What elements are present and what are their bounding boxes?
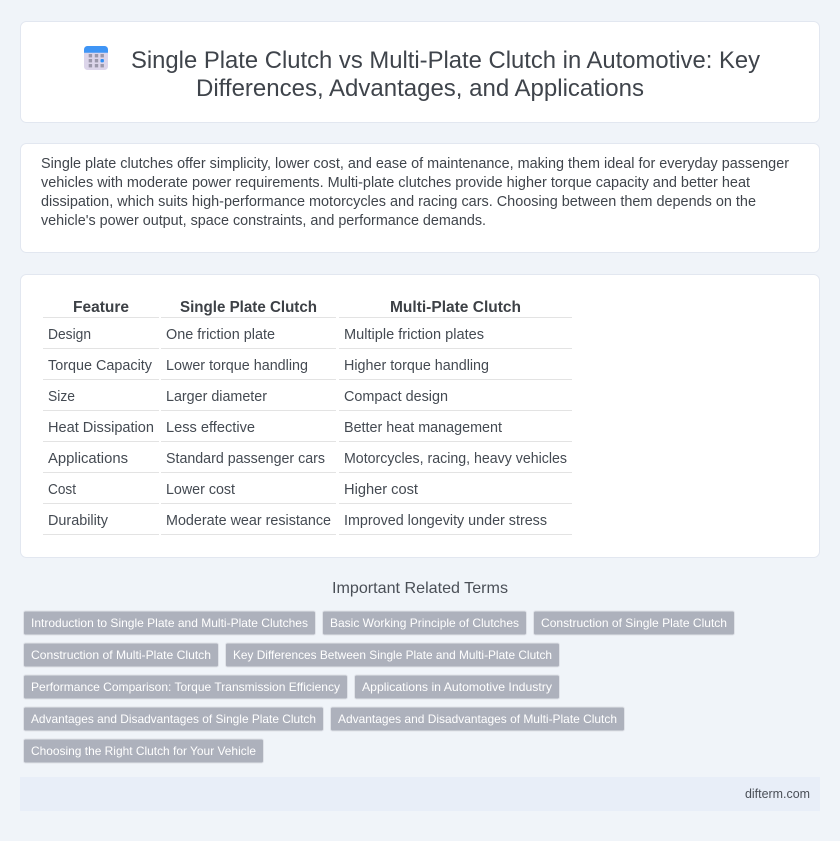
table row: durability: Durability <box>48 513 109 529</box>
tag <box>534 611 734 635</box>
table header: Multi-Plate Clutch <box>390 299 521 316</box>
tag <box>24 675 348 699</box>
tag: Advantages and Disadvantages of Multi-Plate Clutch <box>338 712 617 726</box>
table row: design: One friction plate <box>166 327 275 343</box>
tag: Basic Working Principle of Clutches <box>330 616 519 630</box>
panel: introduction <box>20 144 820 252</box>
table row: design: Design <box>48 327 91 343</box>
tag <box>24 707 324 731</box>
table row: applications: Standard passenger cars <box>166 451 325 467</box>
tag: Advantages and Disadvantages of Single Plate Clutch <box>31 712 316 726</box>
tag: Performance Comparison: Torque Transmission Efficiency <box>31 680 340 694</box>
tag <box>226 643 560 667</box>
table row: heat dissipation: Better heat management <box>344 420 502 436</box>
table row: torque capacity <box>48 358 489 374</box>
related term tags <box>24 611 734 763</box>
text block: introduction <box>41 156 789 229</box>
tag <box>24 739 264 763</box>
tag <box>24 643 218 667</box>
table header: Single Plate Clutch <box>180 299 317 316</box>
tag: Construction of Multi-Plate Clutch <box>31 648 211 662</box>
table row: cost: Higher cost <box>344 482 418 498</box>
table row: durability: Moderate wear resistance <box>166 513 331 529</box>
text block: introduction: dissipation, which suits high-performance motorcycles and racing cars. Choosing between them depends on the <box>41 194 756 210</box>
table row: size: Compact design <box>344 389 448 405</box>
tag <box>24 611 316 635</box>
tag <box>330 707 624 731</box>
heading: important related terms: Important Related Terms <box>332 580 508 597</box>
table row: applications: Motorcycles, racing, heavy vehicles <box>344 451 567 467</box>
table row: durability <box>48 513 547 529</box>
panel: comparison table <box>20 274 820 558</box>
tag: Choosing the Right Clutch for Your Vehicle <box>31 744 256 758</box>
table row: cost: Lower cost <box>166 482 235 498</box>
table row: applications <box>48 451 567 467</box>
table row: applications: Applications <box>48 451 128 467</box>
text block: introduction: vehicles with moderate power requirements. Multi-plate clutches provide higher torque capacity and better heat <box>41 175 750 191</box>
text block: introduction: vehicle's power output, space constraints, and performance demands. <box>41 213 486 229</box>
table row: cost <box>48 482 418 498</box>
title: Single Plate Clutch vs Multi-Plate Clutch in Automotive: Key <box>131 47 760 74</box>
table row: heat dissipation: Heat Dissipation <box>48 420 154 436</box>
table row: design <box>48 327 484 343</box>
table header: Feature <box>73 299 129 316</box>
table row: torque capacity: Lower torque handling <box>166 358 308 374</box>
tag <box>322 611 526 635</box>
footer text: difterm.com <box>745 786 810 801</box>
table row: torque capacity: Higher torque handling <box>344 358 489 374</box>
tag: Construction of Single Plate Clutch <box>541 616 727 630</box>
table row: durability: Improved longevity under stress <box>344 513 547 529</box>
table row: cost: Cost <box>48 482 76 498</box>
table row: torque capacity: Torque Capacity <box>48 358 153 374</box>
table row: size <box>48 389 448 405</box>
tag: Applications in Automotive Industry <box>362 680 552 694</box>
icon: calendar <box>84 46 108 70</box>
table row: heat dissipation: Less effective <box>166 420 255 436</box>
tag: Introduction to Single Plate and Multi-Plate Clutches <box>31 616 308 630</box>
panel: header <box>20 22 820 122</box>
table row: size: Larger diameter <box>166 389 267 405</box>
footer bar <box>20 777 820 811</box>
table row: size: Size <box>48 389 75 405</box>
tag: Key Differences Between Single Plate and Multi-Plate Clutch <box>233 648 552 662</box>
table row: design: Multiple friction plates <box>344 327 484 343</box>
table header <box>73 299 521 316</box>
table row: heat dissipation <box>48 420 502 436</box>
title: Differences, Advantages, and Applications <box>196 75 644 102</box>
title <box>131 47 760 102</box>
tag <box>354 675 560 699</box>
text block: introduction: Single plate clutches offer simplicity, lower cost, and ease of maintenance, making them ideal for everyday passenger <box>41 156 789 172</box>
